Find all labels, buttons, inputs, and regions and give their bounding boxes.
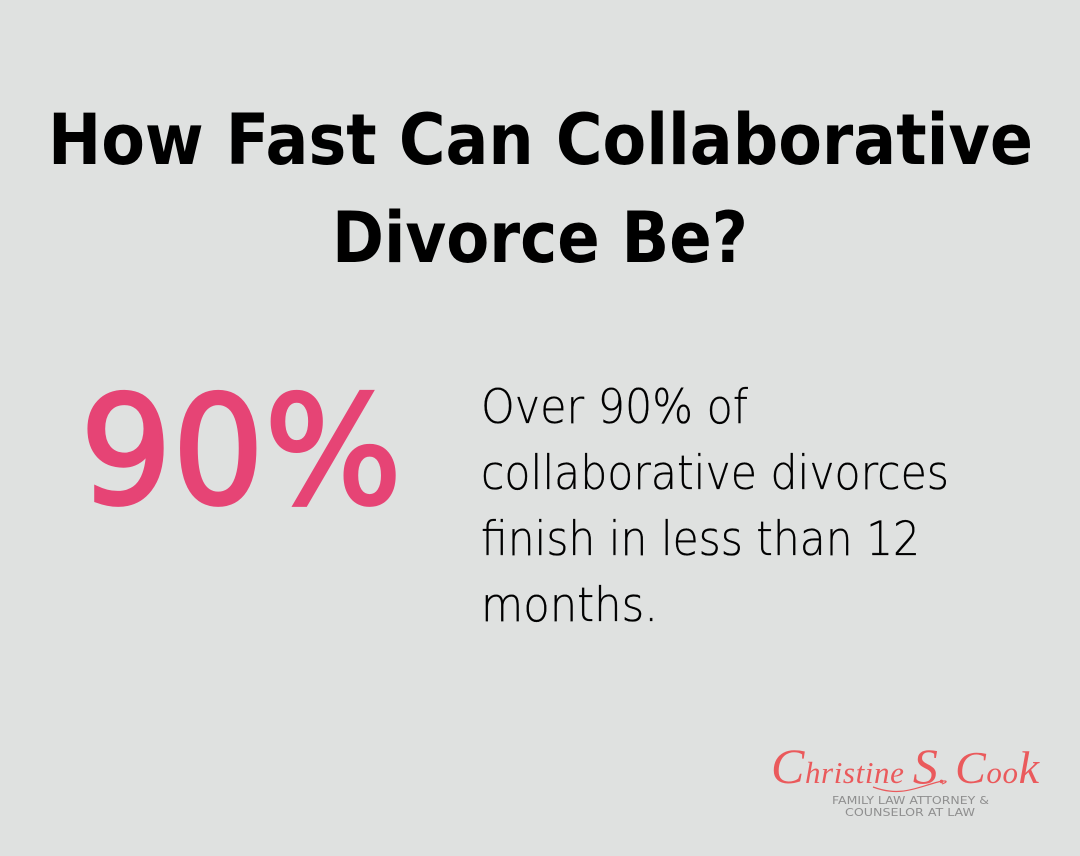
- title: Divorce Be?: [332, 197, 748, 279]
- logo tagline: [832, 795, 989, 819]
- statistic description: Over 90% of: [481, 380, 748, 435]
- logo tagline: FAMILY LAW ATTORNEY &: [832, 795, 989, 807]
- logo tagline: COUNSELOR AT LAW: [845, 807, 976, 819]
- statistic description: [481, 380, 949, 633]
- big statistic: 90%: 90%: [80, 365, 402, 539]
- statistic description: months.: [481, 578, 658, 633]
- statistic description: finish in less than 12: [481, 512, 920, 567]
- statistic description: collaborative divorces: [481, 446, 949, 501]
- logo: Christine S. Cook: [771, 738, 1041, 819]
- logo name: Christine S. Cook: [771, 738, 1041, 794]
- logo flourish: [873, 781, 946, 791]
- title: [48, 99, 1033, 279]
